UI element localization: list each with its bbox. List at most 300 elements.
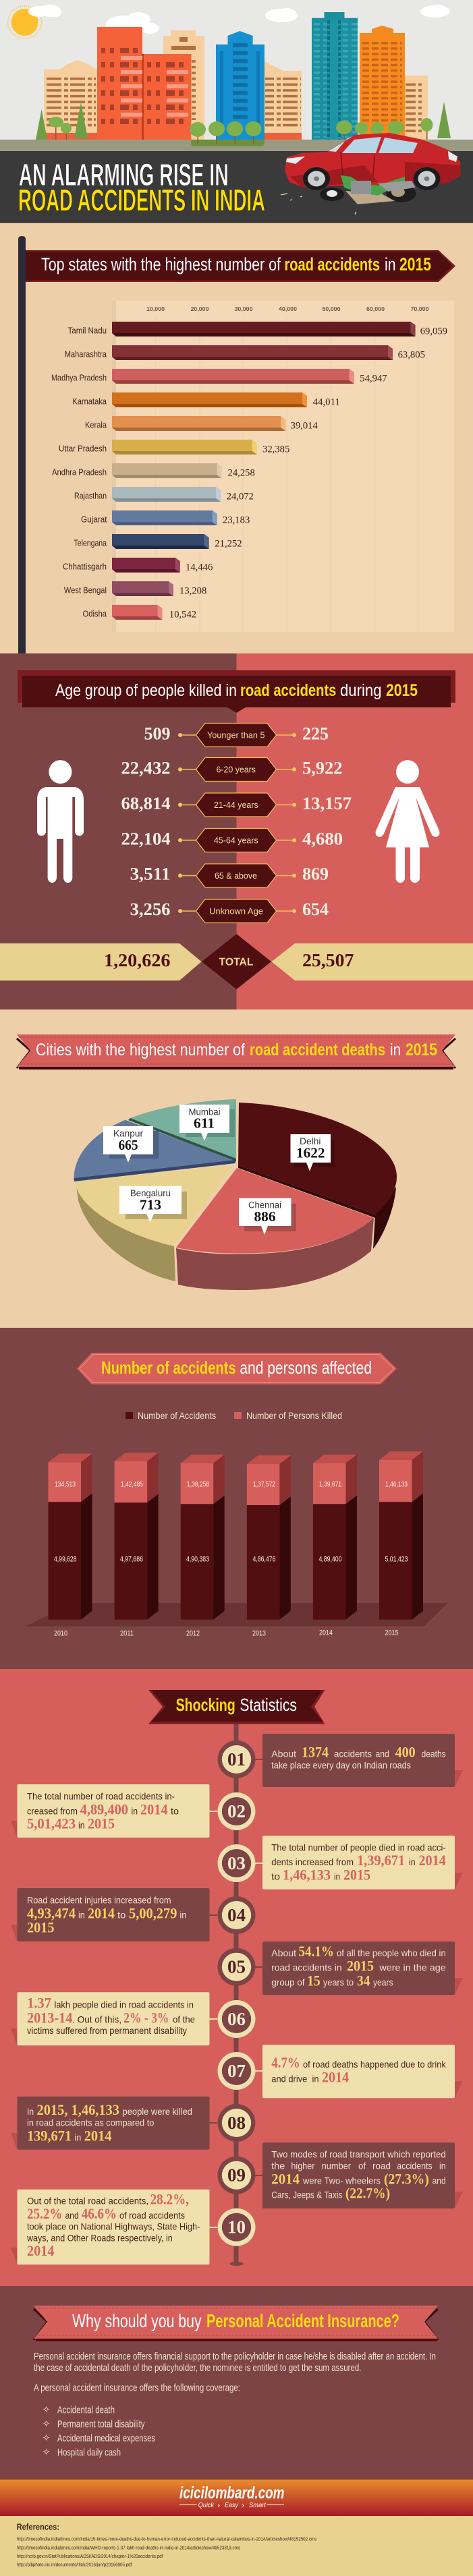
stat 01 xyxy=(217,1734,463,1787)
stat 06: 06 xyxy=(227,2009,246,2029)
icon: peach building right xyxy=(265,61,302,140)
stat 02: 4,89,400 xyxy=(80,1801,128,1818)
panel: top states bar chart section xyxy=(0,223,473,653)
stat 09: 09 xyxy=(227,2165,246,2186)
title: AN ALARMING RISE IN xyxy=(19,157,229,192)
footer: brand: icicilombard.com xyxy=(179,2484,285,2502)
stat 03 xyxy=(217,1836,463,1890)
row: 45-64 years: 45-64 years xyxy=(214,835,258,846)
stat 06: victims suffered from permanent disability xyxy=(27,2025,187,2036)
stat 02 xyxy=(11,1784,255,1838)
bar: 2010: 134,513 xyxy=(55,1480,76,1488)
footer: brand: › xyxy=(217,2501,220,2509)
bar: Uttar Pradesh xyxy=(59,440,289,455)
axis labels: 70,000 xyxy=(410,305,429,312)
stat 09: the xyxy=(271,2160,285,2171)
stat 10: 46.6% xyxy=(82,2205,117,2222)
legend: Number of Accidents xyxy=(138,1410,216,1421)
icon: clouds xyxy=(28,5,450,34)
bar chart: states xyxy=(51,299,455,633)
stat 04: to xyxy=(117,1909,126,1920)
stat 07 xyxy=(217,2045,463,2098)
panel: personal accident insurance section xyxy=(0,2286,473,2480)
stat 08: in road accidents as compared to xyxy=(27,2117,155,2128)
heading: insurance ribbon: Personal Accident Insurance? xyxy=(206,2310,399,2331)
stat 06: lakh people died in road accidents in xyxy=(54,1999,194,2010)
stat 09: road xyxy=(372,2160,391,2171)
slice: Mumbai xyxy=(128,1099,236,1161)
stat 03: 1,39,671 xyxy=(357,1852,405,1869)
stat 02: 02 xyxy=(227,1801,246,1821)
stat 05: 15 xyxy=(307,1972,321,1989)
heading: age group xyxy=(18,670,455,713)
bar: Madhya Pradesh: 54,947 xyxy=(360,374,387,384)
callout: Delhi xyxy=(290,1134,335,1171)
stat 01: About xyxy=(271,1749,296,1759)
bar: 2015: 5,01,423 xyxy=(385,1556,408,1564)
icon: orange-red building xyxy=(97,27,191,140)
row: 65 and above: 869 xyxy=(302,865,329,884)
bar: Uttar Pradesh: 32,385 xyxy=(262,444,289,455)
heading: cities ribbon: in xyxy=(390,1041,401,1059)
row: 65 and above: 65 & above xyxy=(215,871,257,881)
row: Unknown Age xyxy=(130,900,329,923)
bar: 2014: 4,89,400 xyxy=(318,1556,341,1564)
heading: cities ribbon: road accident deaths xyxy=(250,1041,385,1059)
bar: Kerala xyxy=(85,416,318,432)
icon: peach building far right xyxy=(405,76,428,140)
list: coverage: ✧ xyxy=(42,2419,51,2430)
bar: Telengana xyxy=(74,534,242,549)
icon: orange tower xyxy=(360,26,405,140)
stat 10: 2014 xyxy=(27,2242,54,2259)
bar: West Bengal: West Bengal xyxy=(64,585,107,595)
bar: 2015: 1,46,133 xyxy=(385,1480,408,1488)
bar: Rajasthan: 24,072 xyxy=(227,491,254,502)
bar: 2013 xyxy=(247,1455,291,1638)
bar: Karnataka: Karnataka xyxy=(72,397,107,406)
bar: West Bengal: 13,208 xyxy=(179,585,206,596)
icon: sun xyxy=(8,6,42,38)
row: Younger than 5 xyxy=(144,723,329,747)
legend: Number of Persons Killed xyxy=(246,1410,342,1421)
icon: road verge xyxy=(0,140,473,151)
stat 08: 2014 xyxy=(84,2127,111,2144)
footer: brand: › xyxy=(242,2501,244,2509)
callout: Chennai xyxy=(239,1198,296,1235)
total band xyxy=(0,934,473,989)
stat 09: accidents xyxy=(397,2160,433,2171)
stat 03: The total number of people died in road acci- xyxy=(271,1842,446,1852)
row: 21-44 years: 13,157 xyxy=(302,794,352,813)
bar: Telengana: 21,252 xyxy=(215,538,242,549)
row: Younger than 5: 225 xyxy=(302,724,329,744)
heading: top states: road accidents xyxy=(285,254,380,274)
list: coverage xyxy=(42,2405,155,2458)
slice: Kanpur xyxy=(74,1120,235,1181)
bar: Odisha: 10,542 xyxy=(169,610,196,620)
footer: brand: Easy xyxy=(225,2501,239,2509)
bar: 2013: 4,86,476 xyxy=(252,1556,275,1564)
bar: Tamil Nadu: 69,059 xyxy=(420,326,447,337)
list: coverage: ✧ xyxy=(42,2447,51,2458)
stat 05: 2015 xyxy=(347,1958,374,1974)
stat 06: of the xyxy=(173,2014,195,2024)
bar: Gujarat: Gujarat xyxy=(81,515,107,524)
bar: Chhattisgarh: 14,446 xyxy=(186,562,213,573)
stat 03: dents increased from xyxy=(271,1856,354,1867)
stat 10: 28.2%, xyxy=(150,2190,189,2207)
callout: Chennai: 886 xyxy=(254,1208,275,1225)
bar: 2012: 1,38,258 xyxy=(187,1480,209,1488)
callout: Kanpur xyxy=(103,1126,159,1163)
panel: accidents and persons section xyxy=(0,1328,473,1669)
stat 01: 1374 xyxy=(302,1744,329,1761)
bar: 2014: 1,39,671 xyxy=(319,1480,341,1488)
stat 01: deaths xyxy=(421,1749,446,1759)
heading: top states: 2015 xyxy=(399,254,431,274)
stat 06: . Out of this, xyxy=(72,2014,121,2024)
title: ROAD ACCIDENTS IN INDIA xyxy=(18,183,265,218)
callout: Chennai: Chennai xyxy=(248,1200,281,1210)
icon: crashed car and motorcycle xyxy=(281,133,461,214)
stat 03: 2015 xyxy=(343,1866,370,1883)
stat 10 xyxy=(11,2190,255,2266)
row: Unknown Age: Unknown Age xyxy=(209,906,263,916)
bar: Chhattisgarh: Chhattisgarh xyxy=(63,562,107,571)
row: 45-64 years: 22,104 xyxy=(121,829,170,848)
references xyxy=(0,2516,473,2576)
bar: Rajasthan xyxy=(74,487,254,502)
stat 09: Cars, Jeeps & Taxis xyxy=(271,2190,342,2200)
callout: Mumbai: 611 xyxy=(194,1115,215,1132)
bar: 2010 xyxy=(49,1454,92,1638)
icon: peach building left xyxy=(44,60,97,140)
list: coverage: Accidental medical expenses xyxy=(57,2433,155,2444)
slice: Chennai xyxy=(176,1168,374,1290)
axis labels: 60,000 xyxy=(366,305,385,312)
stacked bar chart xyxy=(26,1451,448,1638)
stat 05: 54.1% xyxy=(298,1943,334,1960)
callout: Bengaluru xyxy=(119,1186,187,1223)
icon: blue building xyxy=(216,31,265,140)
icon: trees xyxy=(36,102,451,144)
stat 03: 03 xyxy=(227,1853,246,1873)
callout: Bengaluru: Bengaluru xyxy=(130,1188,171,1198)
bar: Tamil Nadu xyxy=(68,322,447,337)
references: http://pibphoto.nic.in/documents/rlink/2016/jun/p20166905.pdf xyxy=(17,2563,132,2568)
stat 03: 1,46,133 xyxy=(283,1866,331,1883)
heading: number of accidents xyxy=(77,1353,397,1384)
row: Younger than 5: Younger than 5 xyxy=(207,730,265,740)
pie chart: cities xyxy=(74,1099,397,1290)
stat 10: 25.2% xyxy=(27,2205,62,2222)
heading: top states: in xyxy=(385,254,395,274)
bar: Andhra Pradesh xyxy=(52,463,255,479)
bar: Kerala: 39,014 xyxy=(290,421,318,432)
stat 08 xyxy=(11,2097,255,2150)
bar: 2015 xyxy=(379,1451,423,1637)
bar: 2013: 1,37,572 xyxy=(253,1480,275,1488)
bar: 2012: 2012 xyxy=(186,1630,200,1638)
stat 09: higher xyxy=(291,2160,315,2171)
heading: cities ribbon xyxy=(17,1034,455,1070)
stat 10: took place on National Highways, State High- xyxy=(27,2221,200,2232)
footer: brand xyxy=(0,2480,473,2516)
callout: Mumbai xyxy=(179,1105,235,1141)
row: 45-64 years: 4,680 xyxy=(302,829,343,848)
stat 07: 2014 xyxy=(322,2069,349,2086)
stat 10: of road accidents xyxy=(119,2210,185,2221)
heading: age group: Age group of people killed in xyxy=(55,681,237,700)
row: Unknown Age: 654 xyxy=(302,900,329,919)
stat 02: The total number of road accidents in- xyxy=(27,1790,175,1801)
stat 02: in xyxy=(131,1806,138,1817)
list: coverage: Permanent total disability xyxy=(57,2419,145,2430)
stat 02: 2015 xyxy=(88,1815,115,1832)
references: http://ncrb.gov.in/StatPublications/ADSI/ADSI2014/chapter-1%20accidents.pdf xyxy=(17,2554,163,2559)
stat 01: 01 xyxy=(227,1749,246,1769)
bar: 2011 xyxy=(115,1453,159,1638)
list: coverage: Hospital daily cash xyxy=(57,2447,121,2458)
panel: shocking statistics section xyxy=(0,1669,473,2286)
stat 05: years to xyxy=(323,1977,354,1987)
icon: peach building back xyxy=(163,30,204,140)
bar: Telengana: Telengana xyxy=(74,538,107,548)
stat 04: in xyxy=(78,1909,85,1920)
bar: Karnataka xyxy=(72,392,340,407)
bar: Kerala: Kerala xyxy=(85,420,107,430)
axis labels: 30,000 xyxy=(235,305,253,312)
stat 04: 2014 xyxy=(88,1904,115,1921)
stat 05: years xyxy=(373,1977,393,1987)
title xyxy=(18,157,265,218)
stat 08: In xyxy=(27,2106,34,2117)
row: 21-44 years: 21-44 years xyxy=(214,800,258,810)
bar: 2011: 2011 xyxy=(120,1630,134,1638)
bar: West Bengal xyxy=(64,581,206,596)
row: 6-20 years: 6-20 years xyxy=(216,765,256,774)
bar: Maharashtra xyxy=(65,345,425,360)
stat 08: 2015, 1,46,133 xyxy=(36,2101,119,2118)
stat 05: of all the people who died in xyxy=(337,1948,446,1958)
bar: 2010: 4,99,628 xyxy=(54,1556,77,1564)
icon: teal tower xyxy=(312,12,358,140)
stat 09: and xyxy=(433,2175,446,2186)
bar: Gujarat: 23,183 xyxy=(223,515,250,526)
bar: 2015: 2015 xyxy=(385,1629,398,1637)
axis labels: 10,000 xyxy=(146,305,165,312)
bar: 2010: 2010 xyxy=(54,1630,67,1638)
stat 02: 2014 xyxy=(140,1801,167,1818)
callout: Kanpur: 665 xyxy=(119,1137,138,1153)
stat 03: in xyxy=(334,1871,340,1881)
icon: man xyxy=(37,760,84,883)
stat 08: 139,671 xyxy=(27,2127,72,2144)
stat 08: 08 xyxy=(227,2113,246,2133)
stat 04: 04 xyxy=(227,1905,246,1925)
stat 04: 5,00,279 xyxy=(129,1904,177,1921)
heading: shocking statistics: Statistics xyxy=(240,1695,297,1715)
references: References: xyxy=(17,2523,59,2532)
stat 09: in xyxy=(439,2160,446,2171)
stat 05: 05 xyxy=(227,1957,246,1977)
bar: Madhya Pradesh xyxy=(51,369,387,384)
callout: Delhi: Delhi xyxy=(300,1136,321,1146)
callout: Mumbai: Mumbai xyxy=(189,1107,220,1117)
row: 65 and above: 3,511 xyxy=(130,865,170,884)
stat 10: ways, and Other Roads respectively, in xyxy=(26,2233,173,2244)
callout: Kanpur: Kanpur xyxy=(113,1129,143,1139)
bar: Uttar Pradesh: Uttar Pradesh xyxy=(59,444,107,453)
list: coverage: Accidental death xyxy=(57,2405,115,2416)
stat 10: and xyxy=(65,2210,79,2221)
bar: Odisha xyxy=(82,605,196,620)
stat 02: creased from xyxy=(27,1806,78,1817)
row: 6-20 years: 5,922 xyxy=(302,759,343,778)
stat 06: 2013-14 xyxy=(27,2009,72,2026)
axis labels: 40,000 xyxy=(279,305,297,312)
footer: brand: Quick xyxy=(198,2501,215,2509)
heading: age group: 2015 xyxy=(386,681,418,700)
bar: Maharashtra: Maharashtra xyxy=(65,349,107,359)
bar: 2011: 1,42,485 xyxy=(121,1480,143,1488)
bar: Tamil Nadu: Tamil Nadu xyxy=(68,326,107,335)
stat 02: in xyxy=(78,1820,85,1831)
heading: insurance ribbon xyxy=(34,2306,438,2341)
row: 6-20 years: 22,432 xyxy=(121,759,170,778)
heading: insurance ribbon: Why should you buy xyxy=(72,2310,202,2331)
stat 09: 2014 xyxy=(271,2170,300,2187)
axis labels: 20,000 xyxy=(190,305,209,312)
footer: brand: Smart xyxy=(249,2501,267,2509)
stat 08: people were killed xyxy=(123,2106,192,2117)
row: 6-20 years xyxy=(121,758,343,781)
bar: 2012 xyxy=(181,1455,225,1638)
stat 10: Out of the total road accidents, xyxy=(27,2195,148,2206)
references: http://timesofindia.indiatimes.com/india/WHO-reports-1-37-lakh-road-deaths-in-India-in-2014/articleshow/49523319.cms xyxy=(17,2546,240,2550)
stat 04: Road accident injuries increased from xyxy=(27,1895,171,1906)
text block: insurance description xyxy=(34,2351,436,2394)
stat 06: 1.37 xyxy=(27,1995,51,2012)
panel: header city scene xyxy=(0,0,473,224)
text block: insurance description: the case of accidental death of the policyholder, the nominee is entitled to get the sum assured. xyxy=(34,2363,362,2374)
stat 03: 2014 xyxy=(418,1852,446,1869)
row: 65 and above xyxy=(130,864,329,887)
bar: Andhra Pradesh: 24,258 xyxy=(228,468,255,479)
heading: number of accidents: Number of accidents xyxy=(101,1357,236,1378)
slice: Delhi xyxy=(238,1103,397,1249)
total band: 1,20,626 xyxy=(104,950,170,970)
stat 04 xyxy=(11,1888,255,1941)
stat 09 xyxy=(217,2142,463,2208)
bar: 2011: 4,97,686 xyxy=(120,1556,143,1564)
stat 01: and xyxy=(375,1749,389,1759)
slice: Bengaluru side xyxy=(76,1181,175,1281)
heading: number of accidents: and persons affected xyxy=(240,1357,372,1378)
list: coverage: ✧ xyxy=(42,2433,51,2444)
stat 04: 4,93,474 xyxy=(27,1904,76,1921)
heading: top states: Top states with the highest number of xyxy=(41,254,281,274)
stat 02: to xyxy=(171,1806,179,1817)
stat 06 xyxy=(11,1992,255,2045)
heading: age group: during xyxy=(340,681,382,700)
stat 01: take place every day on Indian roads xyxy=(271,1759,411,1770)
row: Unknown Age: 3,256 xyxy=(130,900,170,919)
panel: age group section xyxy=(0,653,473,1009)
stat 04: in xyxy=(179,1909,186,1920)
bar: Maharashtra: 63,805 xyxy=(398,349,425,360)
stat 05: were in the age xyxy=(379,1962,446,1973)
heading: shocking statistics: Shocking xyxy=(176,1695,235,1715)
references: http://timesofindia.indiatimes.com/india/15-times-more-deaths-due-to-human-error-induced-accidents-than-natural-calamities-in-2014/articleshow/48152502.cms xyxy=(17,2538,317,2542)
stat 01: accidents xyxy=(334,1749,372,1759)
bar: Rajasthan: Rajasthan xyxy=(74,491,107,500)
total band: 25,507 xyxy=(302,950,354,970)
icon: banner pole xyxy=(18,236,26,653)
heading: age group: road accidents xyxy=(240,681,336,700)
bar: Chhattisgarh xyxy=(63,558,213,573)
row: 45-64 years xyxy=(121,828,343,852)
bar: Karnataka: 44,011 xyxy=(313,397,340,407)
stat 01: 400 xyxy=(395,1744,416,1761)
heading: cities ribbon: 2015 xyxy=(406,1041,437,1059)
axis labels xyxy=(146,305,429,312)
stat 09: (27.3%) xyxy=(384,2170,429,2187)
bar: 2014 xyxy=(313,1455,357,1637)
stat 07: and drive in xyxy=(271,2074,318,2084)
stat 05: road accidents in xyxy=(271,1962,341,1973)
stat 10: 10 xyxy=(227,2217,246,2237)
legend xyxy=(126,1410,342,1421)
timeline spine xyxy=(233,1724,239,2264)
axis labels: 50,000 xyxy=(323,305,341,312)
stat 05: group of xyxy=(271,1977,305,1987)
bar: Gujarat xyxy=(81,510,250,526)
row: Younger than 5: 509 xyxy=(144,724,170,744)
stat 08: in xyxy=(74,2132,81,2142)
heading: top states xyxy=(26,250,455,282)
list: coverage: ✧ xyxy=(42,2405,51,2416)
slice: Bengaluru xyxy=(75,1165,233,1246)
bar: Madhya Pradesh: Madhya Pradesh xyxy=(51,373,107,382)
stat 05 xyxy=(217,1941,463,1995)
stat 07: of road deaths happened due to drink xyxy=(303,2059,447,2070)
panel: cities pie section xyxy=(0,1009,473,1328)
stat 05: About xyxy=(271,1948,296,1958)
stat 09: Two modes of road transport which reported xyxy=(271,2148,446,2159)
callout: Bengaluru: 713 xyxy=(140,1196,161,1212)
stat 09: number xyxy=(322,2160,351,2171)
bar: Odisha: Odisha xyxy=(82,609,107,618)
stat 03: to xyxy=(271,1871,280,1881)
text block: insurance description: A personal accident insurance offers the following coverage: xyxy=(34,2383,240,2394)
stat 04: 2015 xyxy=(27,1919,54,1936)
callout: Delhi: 1622 xyxy=(296,1145,325,1161)
bar: 2013: 2013 xyxy=(252,1630,266,1638)
stat 05: 34 xyxy=(357,1972,370,1989)
bar: 2014: 2014 xyxy=(319,1629,333,1637)
stat 09: were Two- wheelers xyxy=(302,2175,381,2186)
stat 06: 2% - 3% xyxy=(123,2009,169,2026)
stat 07: 07 xyxy=(227,2061,246,2081)
stat 02: 5,01,423 xyxy=(27,1815,76,1832)
icon: woman xyxy=(376,760,439,883)
total band: TOTAL xyxy=(219,956,254,968)
stat 09: (22.7%) xyxy=(345,2185,390,2202)
bar: Andhra Pradesh: Andhra Pradesh xyxy=(52,467,107,477)
bar: 2012: 4,90,383 xyxy=(186,1556,209,1564)
